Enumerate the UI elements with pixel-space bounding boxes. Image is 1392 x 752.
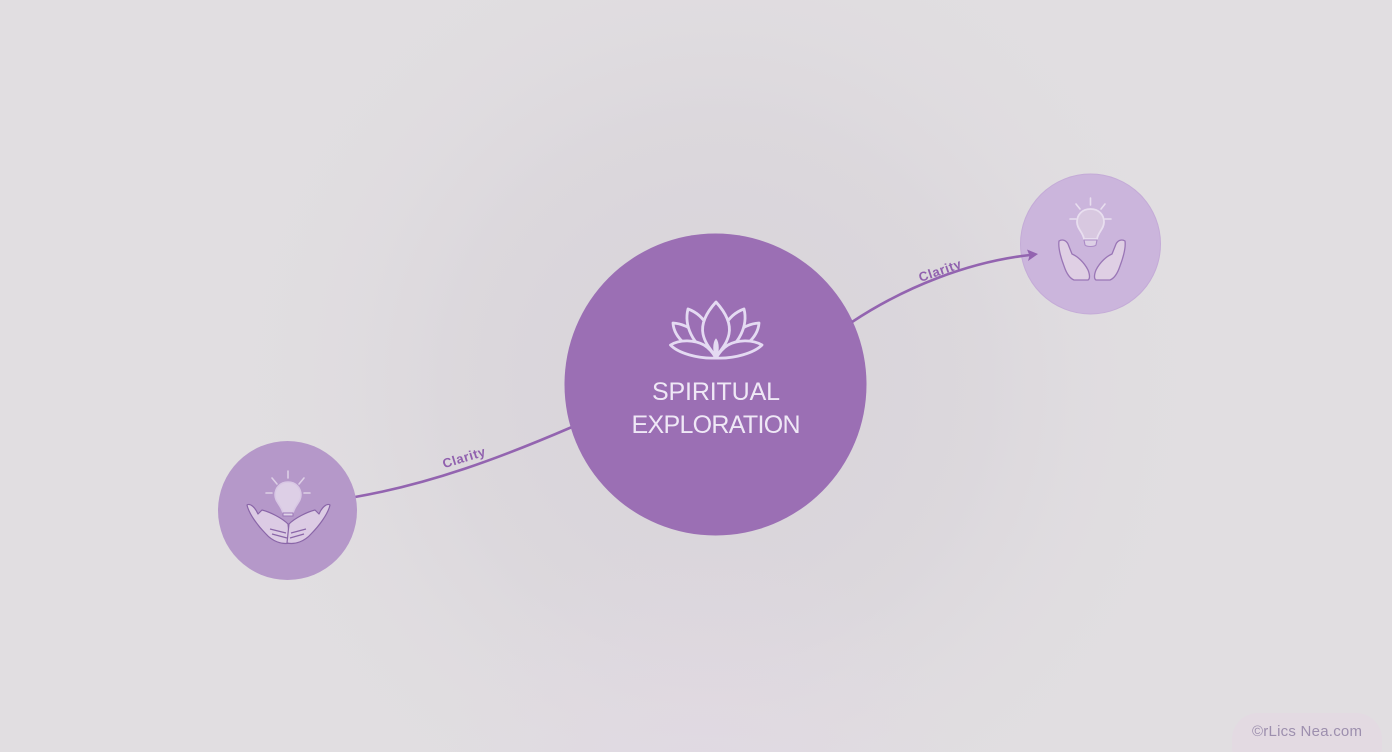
connector: left node to centre [355,427,572,497]
connector arrow: centre to right node [852,250,1038,322]
icon: lotus [670,302,762,358]
panel: central circle [564,234,866,536]
icon: light bulb [1070,198,1111,246]
panel: right node [1020,174,1160,314]
icon: cupped hands [247,504,330,544]
label: left Clarity: Clarity [441,444,488,471]
heading: spiritual exploration: EXPLORATION [632,411,800,439]
heading: spiritual exploration: SPIRITUAL [652,378,780,406]
icon: open hands [1059,240,1125,280]
watermark pill [1232,713,1382,752]
watermark pill: ©rLics Nea.com [1252,723,1362,740]
heading: spiritual exploration [632,378,800,439]
icon: light bulb [266,471,310,516]
panel: left node [218,441,357,580]
label: right Clarity: Clarity [917,256,964,285]
